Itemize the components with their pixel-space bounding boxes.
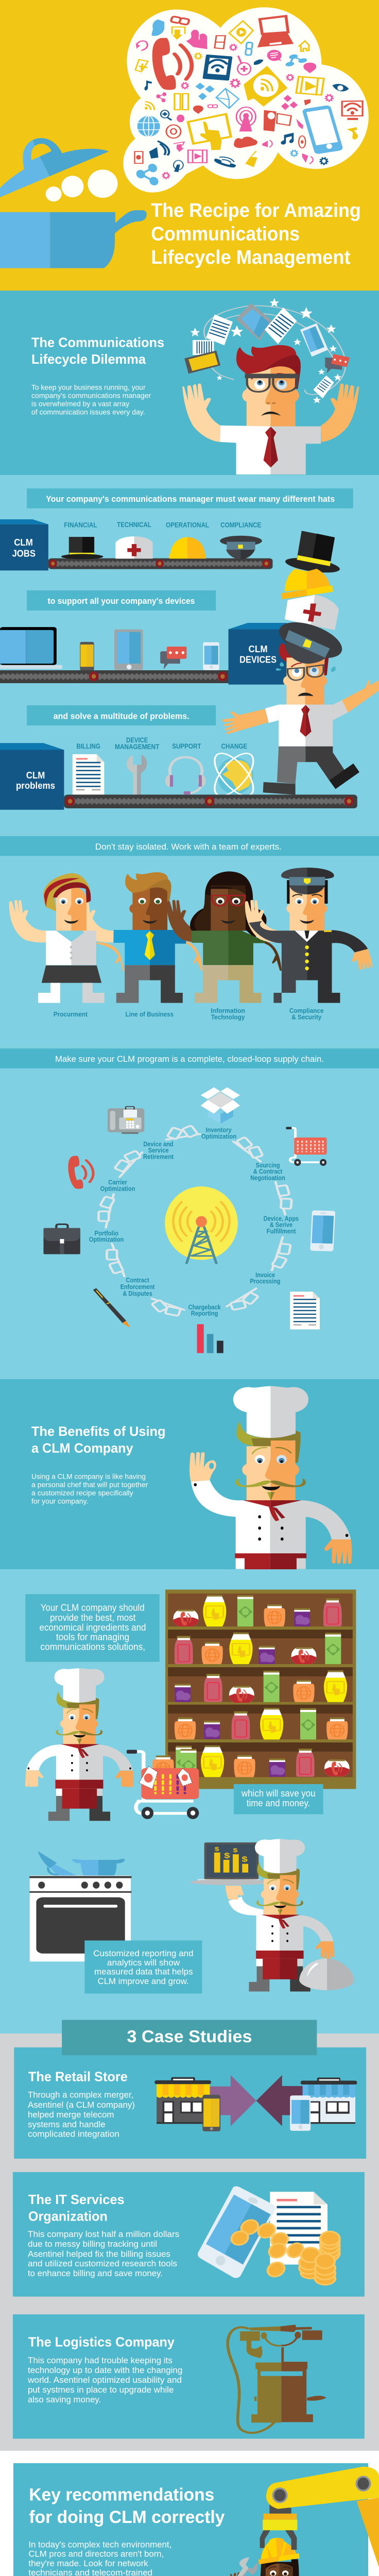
juggling orbit lines <box>204 306 346 395</box>
chain labels: Sourcing <box>256 1162 280 1169</box>
chain labels: & Contract <box>253 1168 282 1175</box>
job labels: TECHNICAL <box>117 520 151 529</box>
illustration: chef presenting results: $ <box>215 1845 219 1852</box>
body text: To keep your business running, your <box>31 383 146 392</box>
diagram: closed-loop chain <box>43 1088 335 1353</box>
job labels <box>64 520 261 529</box>
case study: the logistics company <box>13 2314 365 2438</box>
case study: the retail store <box>14 2047 366 2159</box>
body text <box>31 383 151 416</box>
icon: smartphone with coins <box>198 2187 339 2285</box>
body text: company's communications manager <box>31 391 151 400</box>
case study: the IT services organization <box>13 2172 365 2297</box>
icons: communications icons in cloud <box>134 16 363 188</box>
person: information technology <box>167 871 282 1003</box>
body text: Using a CLM company is like having <box>31 1472 146 1481</box>
team labels: Procurment <box>54 1011 88 1018</box>
illustration: chef presenting results <box>190 1839 354 1991</box>
problem labels: BILLING <box>76 742 100 750</box>
callout: best ingredients: tools for managing <box>56 1632 129 1642</box>
icon: fountain pen <box>93 1288 130 1327</box>
body text: Asentinel (a CLM company) <box>28 2100 135 2110</box>
chain labels <box>89 1127 299 1317</box>
team labels: Line of Business <box>126 1011 174 1018</box>
body text <box>28 2090 135 2139</box>
body text: to enhance billing and save money. <box>28 2268 163 2278</box>
heading <box>31 1423 166 1455</box>
callout: customised reporting: measured data that helps <box>94 1967 193 1977</box>
callout: save time and money: time and money. <box>247 1798 310 1808</box>
case study: the IT services organization: The IT Services <box>28 2192 125 2207</box>
body text: helped merge telecom <box>28 2110 114 2120</box>
illustration: team of four experts <box>9 868 373 1003</box>
body text: In today's complex tech environment, <box>28 2540 171 2550</box>
body text: complicated integration <box>28 2129 119 2139</box>
problem labels: MANAGEMENT <box>115 742 160 751</box>
body text: for your company. <box>31 1497 88 1505</box>
body text: and utilized customized research tools <box>28 2259 177 2268</box>
callout: customised reporting: CLM improve and grow. <box>98 1976 189 1986</box>
chain labels: Device, Apps <box>264 1215 299 1223</box>
thought cloud <box>123 7 369 193</box>
banner: devices: to support all your company's devices <box>47 596 195 606</box>
chain labels: Carrier <box>108 1179 127 1186</box>
icon: juggled phones and documents <box>184 298 350 403</box>
chain labels: Fulfillment <box>267 1228 296 1235</box>
banner: closed-loop supply chain <box>0 1048 379 1069</box>
case study: the retail store: The Retail Store <box>28 2069 128 2084</box>
arrows: merging <box>210 2075 303 2126</box>
box: CLM jobs: JOBS <box>12 548 36 558</box>
box: CLM devices: DEVICES <box>239 654 277 665</box>
chain labels: Device and <box>143 1141 174 1148</box>
callout: best ingredients <box>25 1594 160 1662</box>
banner: problems: and solve a multitude of problems. <box>54 711 190 721</box>
chain labels: Processing <box>250 1278 280 1285</box>
person: compliance and security <box>245 868 373 1003</box>
chain labels: Portfolio <box>95 1230 118 1237</box>
body text: This company lost half a million dollars <box>28 2229 179 2239</box>
box: CLM devices <box>229 623 287 685</box>
chain labels: Service <box>148 1147 169 1154</box>
illustration: manager with stacked hats <box>222 531 379 795</box>
body text: Through a complex merger, <box>28 2090 133 2100</box>
callout: customised reporting: Customized reporting and <box>93 1948 194 1958</box>
problem labels: DEVICE <box>126 736 148 744</box>
icon: cell tower <box>165 1187 238 1263</box>
job labels: OPERATIONAL <box>166 520 209 529</box>
problem labels <box>76 736 247 751</box>
panel: many hats section <box>0 475 379 1379</box>
panel: benefits of using a CLM company <box>0 1379 379 1569</box>
heading <box>31 335 164 367</box>
body text: a personal chef that will put together <box>31 1480 148 1489</box>
job labels: FINANCIAL <box>64 520 97 529</box>
body text: is overwhelmed by a vast array <box>31 399 129 408</box>
chain labels: & Serive <box>270 1222 292 1229</box>
box: CLM problems: CLM <box>26 770 45 781</box>
title <box>151 199 361 268</box>
steam bubbles <box>46 170 118 201</box>
illustration: chef presenting results: $ <box>242 1855 248 1863</box>
heading: Key recommendations <box>29 2484 214 2504</box>
callout: save time and money <box>234 1784 323 1814</box>
shelf of ingredient jars <box>165 1589 356 1789</box>
conveyor belt: devices <box>0 670 229 683</box>
heading: a CLM Company <box>31 1440 133 1455</box>
banner: team of experts: Don't stay isolated. Work with a team of experts. <box>95 842 282 852</box>
person: line of business <box>114 872 202 1003</box>
banner: team of experts <box>0 836 379 856</box>
case study: the logistics company: The Logistics Company <box>28 2334 175 2349</box>
icon: briefcase <box>43 1224 80 1254</box>
chain labels: Enforcement <box>120 1283 154 1291</box>
icons: problems <box>73 749 261 800</box>
illustration: chef presenting results: $ <box>233 1846 238 1854</box>
icon: vintage telephone <box>228 2325 326 2433</box>
problem labels: SUPPORT <box>172 742 201 750</box>
person: procurement <box>9 873 125 1003</box>
panel: key recommendations <box>0 2463 379 2576</box>
chain labels: Invoice <box>255 1272 275 1279</box>
chain labels: Negotioation <box>250 1175 285 1182</box>
panel: hero <box>0 0 379 291</box>
heading: The Communications <box>31 335 164 350</box>
icon: stove with pot <box>29 1851 131 1961</box>
body text: Asentinel helped fix the billing issues <box>28 2249 170 2259</box>
box: CLM devices: CLM <box>249 644 268 654</box>
heading: 3 case studies <box>62 2020 317 2055</box>
body text: a customized recipe specifically <box>31 1488 133 1497</box>
box: CLM jobs <box>0 519 48 570</box>
team labels: Compliance <box>289 1007 324 1014</box>
callout: customised reporting: analytics will show <box>107 1958 180 1968</box>
chain labels: Optimization <box>201 1133 236 1140</box>
icon: blue store <box>290 2077 357 2131</box>
heading: Lifecycle Dilemma <box>31 351 146 367</box>
body text: they're made. Look for network <box>28 2559 148 2568</box>
body text: systems and handle <box>28 2120 106 2129</box>
body text: This company had trouble keeping its <box>28 2355 173 2365</box>
illustration: chef presenting results: $ <box>224 1851 230 1860</box>
heading: for doing CLM correctly <box>29 2506 225 2527</box>
callout: save time and money: which will save you <box>241 1788 316 1799</box>
body text <box>31 1472 148 1505</box>
body text: CLM pros and directors aren't born, <box>28 2550 164 2559</box>
conveyor belt: jobs <box>48 558 272 569</box>
chain labels: & Disputes <box>123 1290 152 1297</box>
box: CLM problems <box>0 743 64 810</box>
icon: bar chart <box>197 1324 223 1353</box>
banner: many different hats <box>27 488 353 509</box>
illustration: chef with shopping cart <box>25 1668 133 1821</box>
icon: white smartphone <box>310 1210 335 1251</box>
icon: invoice <box>270 2192 328 2264</box>
illustration: chef giving OK sign <box>190 1386 352 1569</box>
heading: The Benefits of Using <box>31 1423 166 1439</box>
callout: customised reporting <box>84 1940 202 1994</box>
icons: devices <box>0 627 219 671</box>
body text: world. Asentinel optimized usability and <box>27 2375 182 2385</box>
icons: hats on conveyor <box>61 536 262 559</box>
problem labels: CHANGE <box>221 742 247 750</box>
icon: yellow store <box>154 2077 220 2131</box>
conveyor belt: problems <box>64 794 357 808</box>
team labels <box>54 1007 324 1021</box>
chain labels: Chargeback <box>188 1304 221 1311</box>
chain labels: Optimization <box>100 1185 135 1193</box>
chain labels: Inventory <box>205 1127 232 1134</box>
icon: shopping cart with discount tags <box>127 1749 199 1819</box>
title: Communications <box>151 223 300 245</box>
panel: the communications lifecycle dilemma <box>0 291 379 475</box>
callout: best ingredients: provide the best, most <box>50 1612 135 1623</box>
chain links <box>106 1134 285 1310</box>
callout: best ingredients: economical ingredients and <box>40 1622 146 1633</box>
heading: 3 case studies: 3 Case Studies <box>127 2027 252 2046</box>
case study: the IT services organization: Organization <box>28 2208 108 2224</box>
box: CLM jobs: CLM <box>14 537 33 548</box>
banner: problems <box>27 705 216 725</box>
heading <box>29 2484 225 2527</box>
chain labels: Optimization <box>89 1236 124 1243</box>
icon: fax machine <box>108 1107 144 1134</box>
icon: shopping cart <box>286 1127 327 1166</box>
body text <box>27 2355 182 2404</box>
body text: due to messy billing tracking until <box>28 2239 157 2249</box>
body text: put systmes in place to upgrade while <box>28 2385 174 2395</box>
team labels: Information <box>211 1007 245 1014</box>
chain labels: Reporting <box>191 1310 218 1317</box>
banner: devices <box>27 590 216 611</box>
body text: of communication issues every day. <box>31 408 145 416</box>
icon: open box <box>201 1088 240 1124</box>
box: CLM problems: problems <box>16 780 55 791</box>
callout: best ingredients: Your CLM company should <box>41 1602 145 1613</box>
job labels: COMPLIANCE <box>220 520 261 529</box>
icon: invoice document <box>290 1292 320 1329</box>
illustration: overwhelmed manager <box>182 345 359 474</box>
callout: best ingredients: communications solutions, <box>40 1641 145 1652</box>
icon: pot with lid <box>0 138 147 268</box>
body text <box>28 2229 179 2278</box>
illustration: robot arm assembling worker <box>229 2467 379 2576</box>
chain labels: Retirement <box>143 1154 174 1161</box>
body text: technology up to date with the changing <box>28 2365 182 2375</box>
team labels: Technology <box>211 1014 245 1021</box>
body text <box>28 2540 171 2576</box>
chain labels: Contract <box>126 1277 149 1284</box>
icon: red telephone <box>68 1156 93 1189</box>
panel: 3 case studies <box>0 2020 379 2451</box>
panel: customised ingredients and reporting <box>0 1569 379 2033</box>
body text: also saving money. <box>28 2395 101 2404</box>
team labels: & Security <box>291 1014 322 1021</box>
